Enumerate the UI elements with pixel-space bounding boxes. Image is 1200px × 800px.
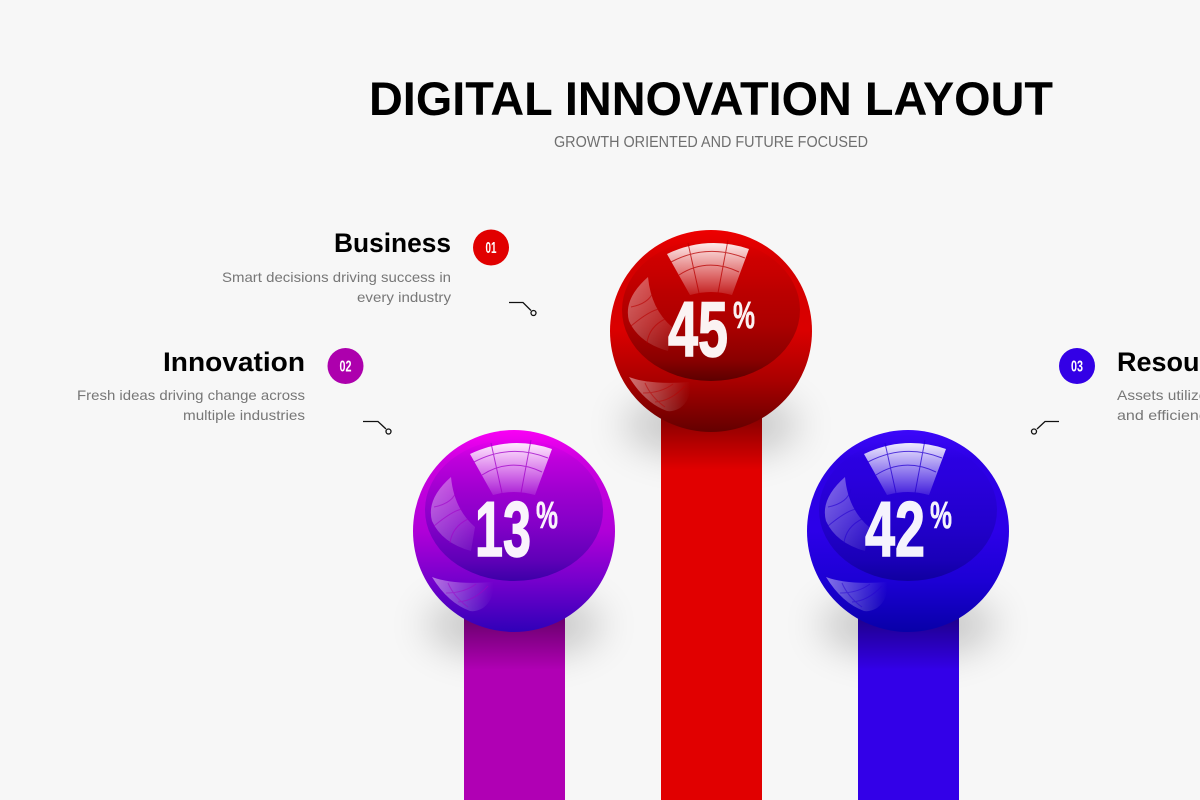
drop shadow: red: [623, 395, 799, 455]
number badge 03: [1059, 348, 1095, 384]
drop shadow: purple: [426, 595, 602, 655]
description: business: Smart decisions driving success in: [222, 269, 451, 285]
bar shade: red: [661, 415, 762, 470]
callout: business: [222, 228, 536, 316]
connector: resources: [1032, 422, 1059, 434]
number badge 02: 02: [340, 358, 352, 376]
drop shadow: blue: [820, 595, 996, 655]
callout: innovation: [77, 347, 391, 434]
sphere: red: [610, 230, 812, 432]
connector: business: [509, 302, 536, 316]
number badge 03: 03: [1071, 358, 1083, 376]
sphere: blue: [807, 430, 1009, 632]
subtitle: GROWTH ORIENTED AND FUTURE FOCUSED: [554, 134, 868, 151]
value: 45 percent: 45: [668, 285, 728, 373]
bar: red: [661, 400, 762, 800]
description: innovation: Fresh ideas driving change across: [77, 387, 305, 403]
bar: purple: [464, 600, 565, 800]
sphere: purple: [413, 430, 615, 632]
description: innovation: multiple industries: [183, 407, 305, 423]
column: blue 42 percent: [807, 430, 1009, 800]
bar: blue: [858, 600, 959, 800]
callout: resources: [1032, 347, 1200, 434]
value: 42 percent: 42: [865, 485, 925, 573]
value: 45 percent: %: [733, 295, 755, 337]
bar shade: purple: [464, 615, 565, 670]
column: red 45 percent: [610, 230, 812, 800]
heading: innovation: Innovation: [163, 347, 305, 377]
value: 42 percent: %: [930, 495, 952, 537]
column: purple 13 percent: [413, 430, 615, 800]
bar shade: blue: [858, 615, 959, 670]
number badge 01: [473, 230, 509, 266]
number badge 01: 01: [486, 240, 497, 257]
connector: innovation: [363, 422, 391, 434]
title: DIGITAL INNOVATION LAYOUT: [369, 72, 1053, 125]
value: 13 percent: %: [536, 495, 558, 537]
heading: business: Business: [334, 228, 451, 258]
number badge 02: [328, 348, 364, 384]
description: business: every industry: [357, 289, 451, 305]
value: 13 percent: 13: [475, 485, 531, 573]
